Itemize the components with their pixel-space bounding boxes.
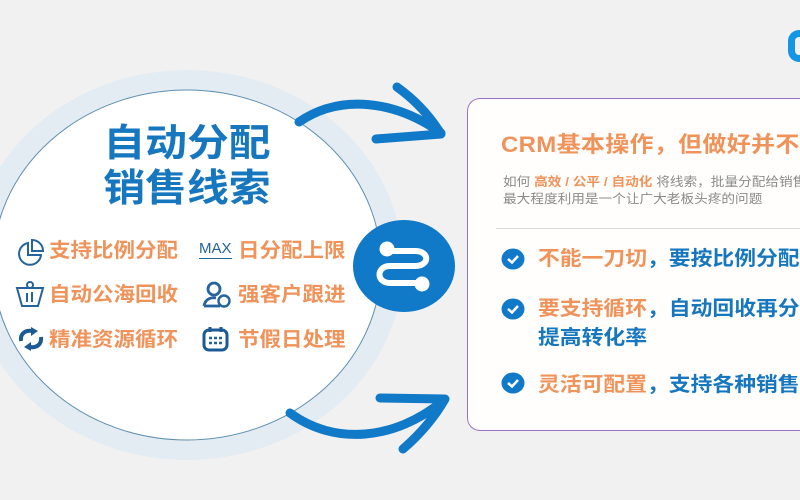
icon: public pool [16,281,44,307]
main white circle [0,90,381,440]
feature: key customers: 强客户跟进 [238,284,346,306]
divider [496,228,800,229]
logo fragment [788,30,800,62]
title [103,123,271,210]
feature list [16,239,346,352]
item text: 提高转化率 [538,327,647,349]
item text: 不能一刀切，要按比例分配 [538,248,800,270]
panel: CRM [467,98,800,431]
item 1 [502,248,800,270]
panel description: 最大程度利用是一个让广大老板头疼的问题 [503,192,762,206]
icon: check [502,298,524,320]
feature: resource cycle: 精准资源循环 [49,329,178,351]
halo ring [0,70,403,460]
title: 销售线索 [103,168,271,210]
panel description: 如何 高效 / 公平 / 自动化 将线索，批量分配给销售 [503,175,800,189]
item 3 [502,372,800,396]
title: 自动分配 [103,123,271,165]
item text: 要支持循环，自动回收再分 [538,298,800,320]
feature: ratio: 支持比例分配 [49,240,178,262]
feature: public pool: 自动公海回收 [49,284,178,306]
icon: pie chart [18,239,44,266]
panel heading: CRM基本操作，但做好并不 [501,132,800,157]
icon: check [502,248,524,270]
arrow: top [299,87,441,139]
icon: calendar [202,327,228,352]
feature: daily cap: 日分配上限 [238,240,346,262]
feature: holidays: 节假日处理 [238,329,346,351]
icon: cycle [18,327,44,351]
icon: blue connector badge [353,220,455,312]
panel description [503,175,800,206]
icon: check [502,372,524,394]
item 2 [502,298,800,349]
item text: 灵活可配置，支持各种销售 [538,374,800,396]
icon: customer clock [202,282,231,308]
icon: MAX: MAX [199,240,232,257]
item text [538,298,800,349]
arrow: bottom [290,398,445,449]
